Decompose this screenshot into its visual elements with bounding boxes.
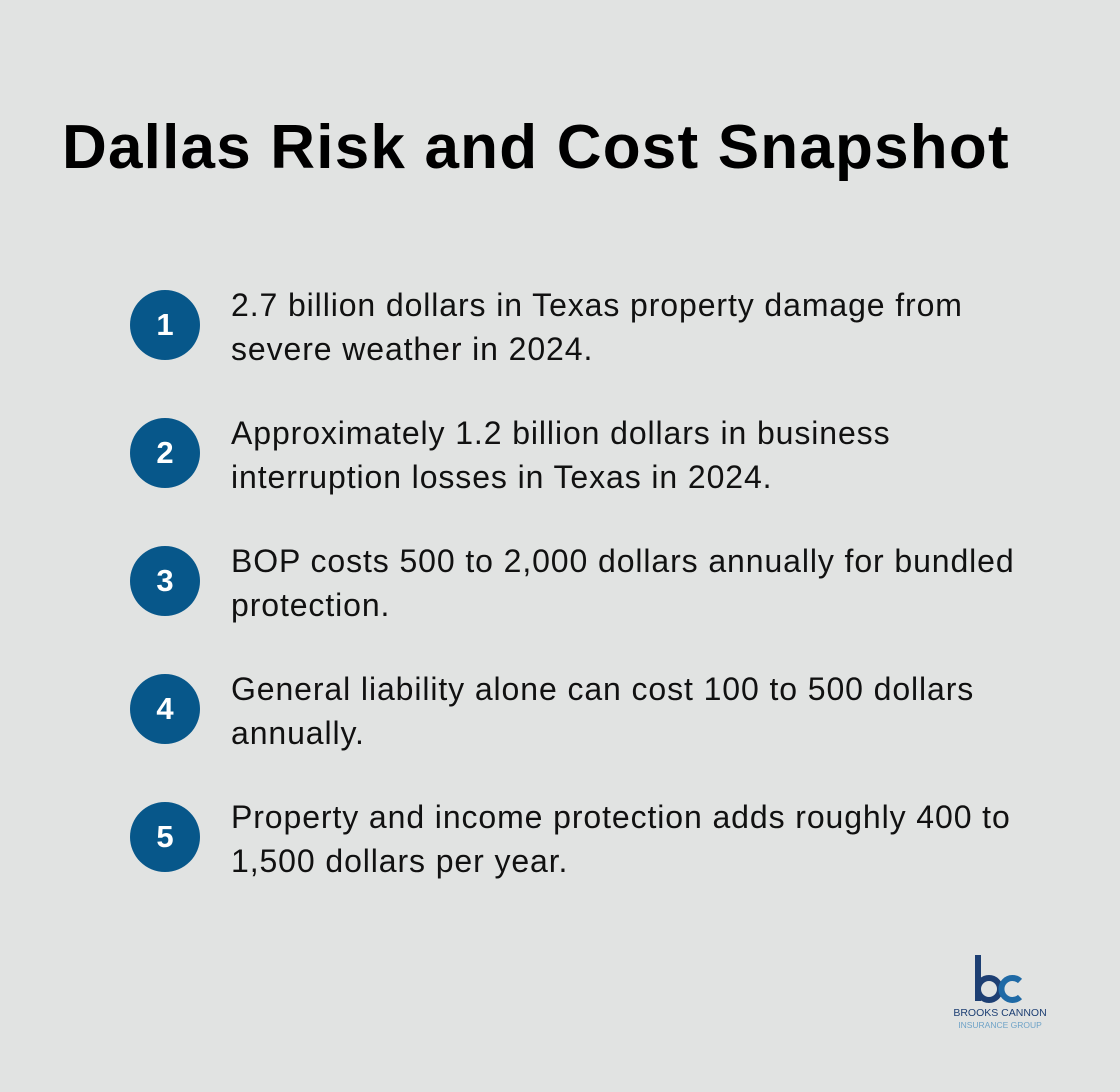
logo text: INSURANCE GROUP <box>958 1020 1042 1030</box>
text 1 <box>231 287 963 367</box>
logo mark <box>975 955 1022 1003</box>
item 5 <box>130 799 1011 879</box>
badge 4: 4 <box>156 691 174 726</box>
text 4: annually. <box>231 715 365 751</box>
text 4 <box>231 671 974 751</box>
badge 5: 5 <box>156 819 174 854</box>
title: Dallas Risk and Cost Snapshot <box>62 113 1010 182</box>
logo text <box>953 1007 1047 1030</box>
badge 2: 2 <box>156 435 174 470</box>
text 1: 2.7 billion dollars in Texas property damage from <box>231 287 963 323</box>
text 3: protection. <box>231 587 390 623</box>
badge 2 <box>130 418 200 488</box>
text 3 <box>231 543 1015 623</box>
item 1 <box>130 287 963 367</box>
badge 3: 3 <box>156 563 174 598</box>
badge 1: 1 <box>156 307 174 342</box>
text 5 <box>231 799 1011 879</box>
text 1: severe weather in 2024. <box>231 331 593 367</box>
badge 1 <box>130 290 200 360</box>
text 2 <box>231 415 890 495</box>
text 2: Approximately 1.2 billion dollars in business <box>231 415 890 451</box>
badge 4 <box>130 674 200 744</box>
item 3 <box>130 543 1015 623</box>
badge 5 <box>130 802 200 872</box>
logo text: BROOKS CANNON <box>953 1007 1047 1019</box>
text 4: General liability alone can cost 100 to 500 dollars <box>231 671 974 707</box>
text 5: Property and income protection adds roughly 400 to <box>231 799 1011 835</box>
badge 3 <box>130 546 200 616</box>
text 3: BOP costs 500 to 2,000 dollars annually for bundled <box>231 543 1015 579</box>
logo <box>953 955 1047 1030</box>
item 4 <box>130 671 974 751</box>
item 2 <box>130 415 890 495</box>
text 2: interruption losses in Texas in 2024. <box>231 459 772 495</box>
text 5: 1,500 dollars per year. <box>231 843 568 879</box>
